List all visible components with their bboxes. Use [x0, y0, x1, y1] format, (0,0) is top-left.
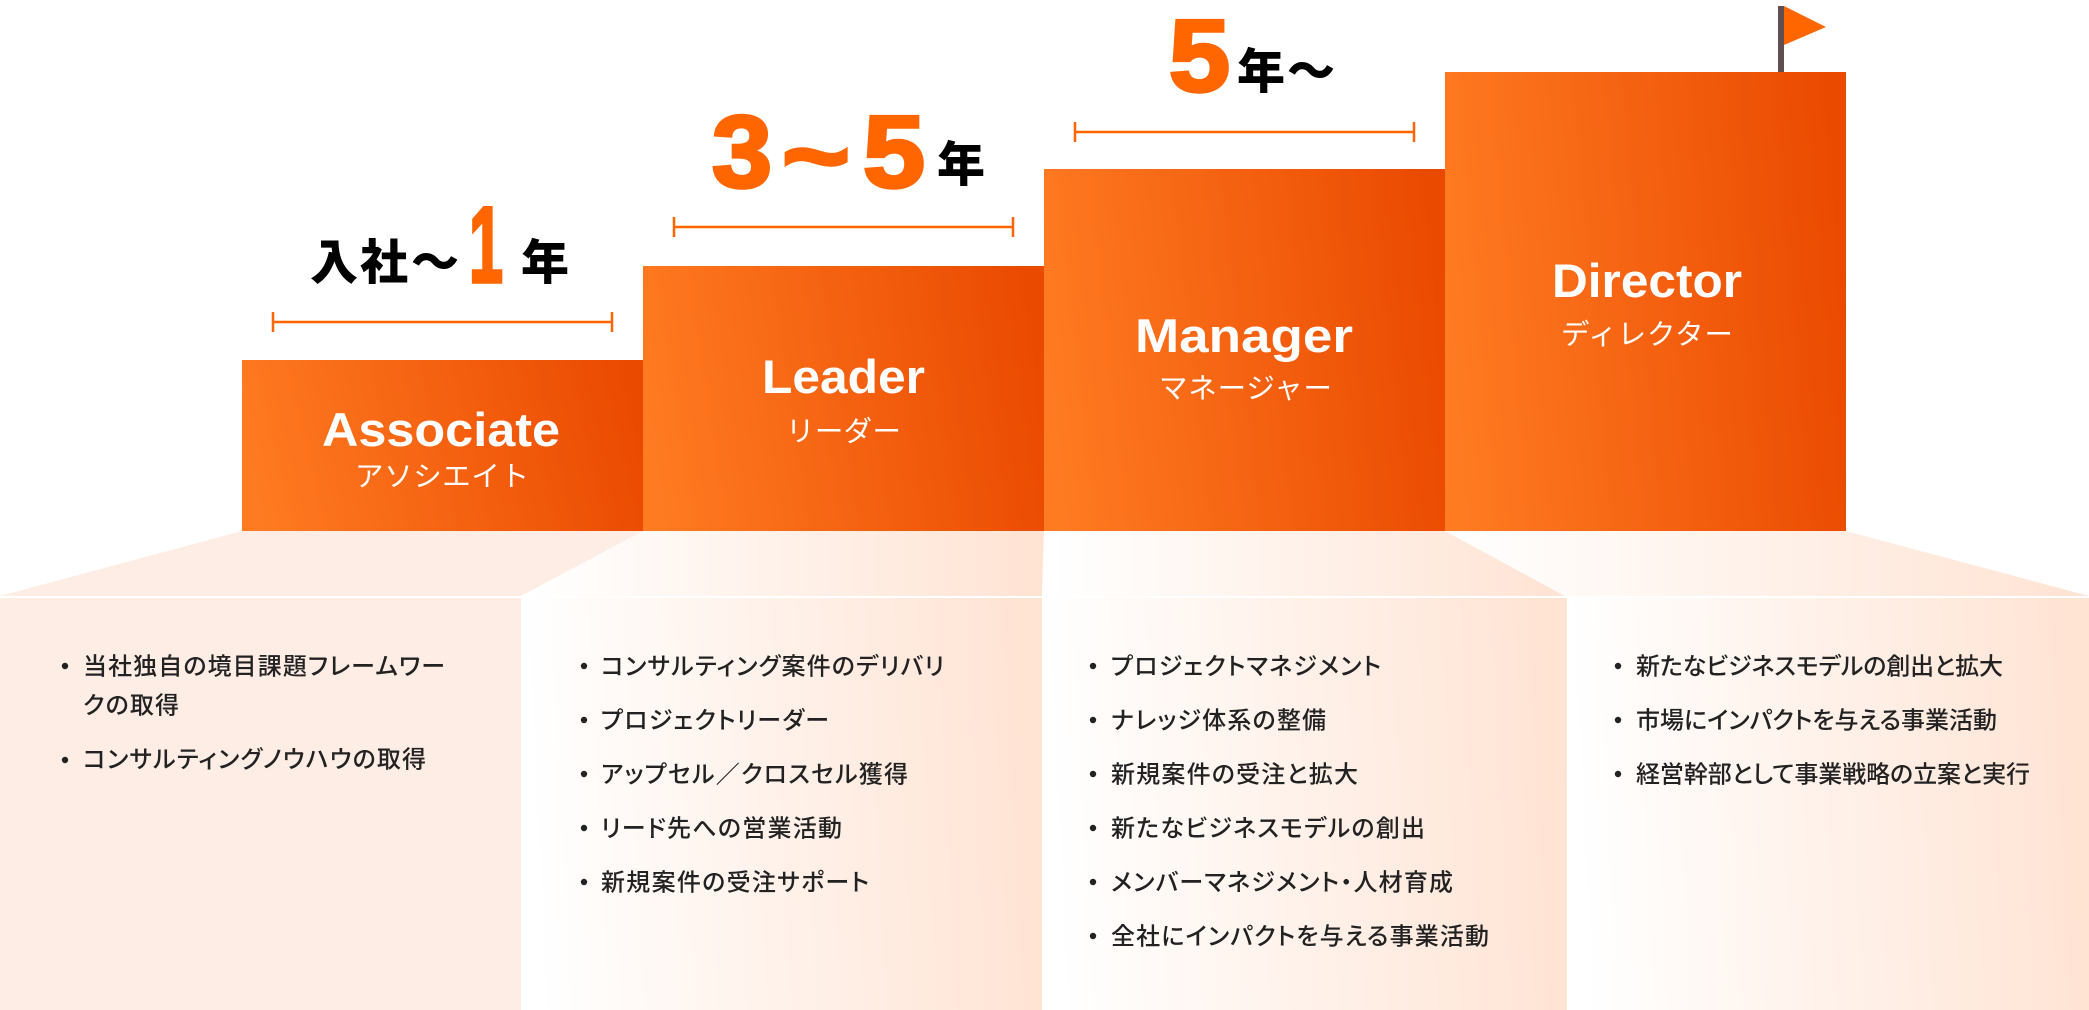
duration label: joining to 1 year: 1	[469, 184, 503, 305]
bracket: Associate span	[273, 312, 612, 332]
bracket: Manager span	[1075, 122, 1414, 142]
duration label: joining to 1 year: 〜	[411, 223, 459, 293]
duration label: 3 to 5 years: ~	[782, 99, 850, 213]
panel: Leader description	[521, 531, 1044, 1010]
duration label: 5 years and up: 年	[1237, 32, 1285, 102]
step: Leader	[643, 266, 1044, 531]
list: Manager responsibilities: ナレッジ体系の整備	[1111, 700, 1326, 736]
list: Associate responsibilities	[62, 646, 445, 774]
list: Leader responsibilities: 新規案件の受注サポート	[601, 862, 869, 898]
list: Leader responsibilities: プロジェクトリーダー	[601, 700, 829, 736]
step: Leader: Leader	[762, 350, 925, 403]
panel: Director description	[1445, 531, 2089, 1010]
list: Associate responsibilities: コンサルティングノウハウの取得	[83, 740, 426, 774]
step: Director: ディレクター	[1561, 312, 1733, 353]
step: Associate: アソシエイト	[355, 454, 529, 495]
step: Associate	[242, 360, 643, 531]
list: Manager responsibilities: 新たなビジネスモデルの創出	[1111, 808, 1425, 844]
list: Director responsibilities: 経営幹部として事業戦略の立案と実行	[1636, 754, 2030, 790]
list: Manager responsibilities	[1090, 646, 1489, 952]
list: Director responsibilities: 市場にインパクトを与える事業活動	[1636, 700, 1997, 736]
duration label: 5 years and up: 〜	[1287, 32, 1335, 102]
duration label: 3 to 5 years: 年	[937, 125, 985, 195]
duration label: joining to 1 year: 年	[521, 223, 569, 293]
list: Leader responsibilities: コンサルティング案件のデリバリ	[601, 646, 944, 682]
list: Manager responsibilities: 全社にインパクトを与える事業活動	[1111, 916, 1489, 952]
list: Leader responsibilities	[581, 646, 944, 898]
duration label: joining to 1 year: 社	[360, 223, 408, 293]
trapezoid: Leader connector	[521, 531, 1044, 596]
panel background: Associate	[0, 598, 521, 1010]
panel background: Director	[1567, 598, 2089, 1010]
panel: Manager description	[1042, 531, 1567, 1010]
list: Manager responsibilities: 新規案件の受注と拡大	[1111, 754, 1358, 790]
list: Manager responsibilities: メンバーマネジメント・人材育成	[1111, 862, 1453, 898]
trapezoid: Director connector	[1445, 531, 2089, 596]
panel background: Leader	[521, 598, 1042, 1010]
duration label: 3 to 5 years: 3	[712, 95, 772, 209]
duration label: 3 to 5 years: 5	[863, 95, 925, 209]
list: Associate responsibilities: 当社独自の境目課題フレームワー	[83, 646, 445, 682]
duration label: 3 to 5 years	[712, 95, 985, 213]
step: Leader: リーダー	[786, 409, 901, 450]
step: Manager: Manager	[1135, 309, 1353, 362]
bracket: Leader span	[674, 217, 1013, 237]
trapezoid: Associate connector	[0, 531, 643, 596]
list: Leader responsibilities: リード先への営業活動	[601, 808, 842, 844]
step: Director	[1445, 72, 1846, 531]
list: Director responsibilities: 新たなビジネスモデルの創出と拡大	[1636, 646, 2003, 682]
list: Associate responsibilities: クの取得	[83, 686, 179, 720]
step: Manager	[1044, 169, 1445, 531]
icon: flag on top step	[1778, 6, 1826, 72]
panel background: Manager	[1042, 598, 1567, 1010]
list: Director responsibilities	[1615, 646, 2030, 790]
list: Manager responsibilities: プロジェクトマネジメント	[1111, 646, 1381, 682]
panel: Associate description	[0, 531, 643, 1010]
step: Manager: マネージャー	[1159, 366, 1332, 407]
duration label: joining to 1 year	[310, 184, 569, 305]
trapezoid: Manager connector	[1042, 531, 1565, 596]
duration label: joining to 1 year: 入	[310, 223, 358, 293]
list: Leader responsibilities: アップセル／クロスセル獲得	[601, 754, 908, 790]
step: Director: Director	[1552, 254, 1742, 307]
duration label: 5 years and up: 5	[1169, 0, 1230, 113]
duration label: 5 years and up	[1169, 0, 1335, 113]
step: Associate: Associate	[322, 403, 560, 456]
